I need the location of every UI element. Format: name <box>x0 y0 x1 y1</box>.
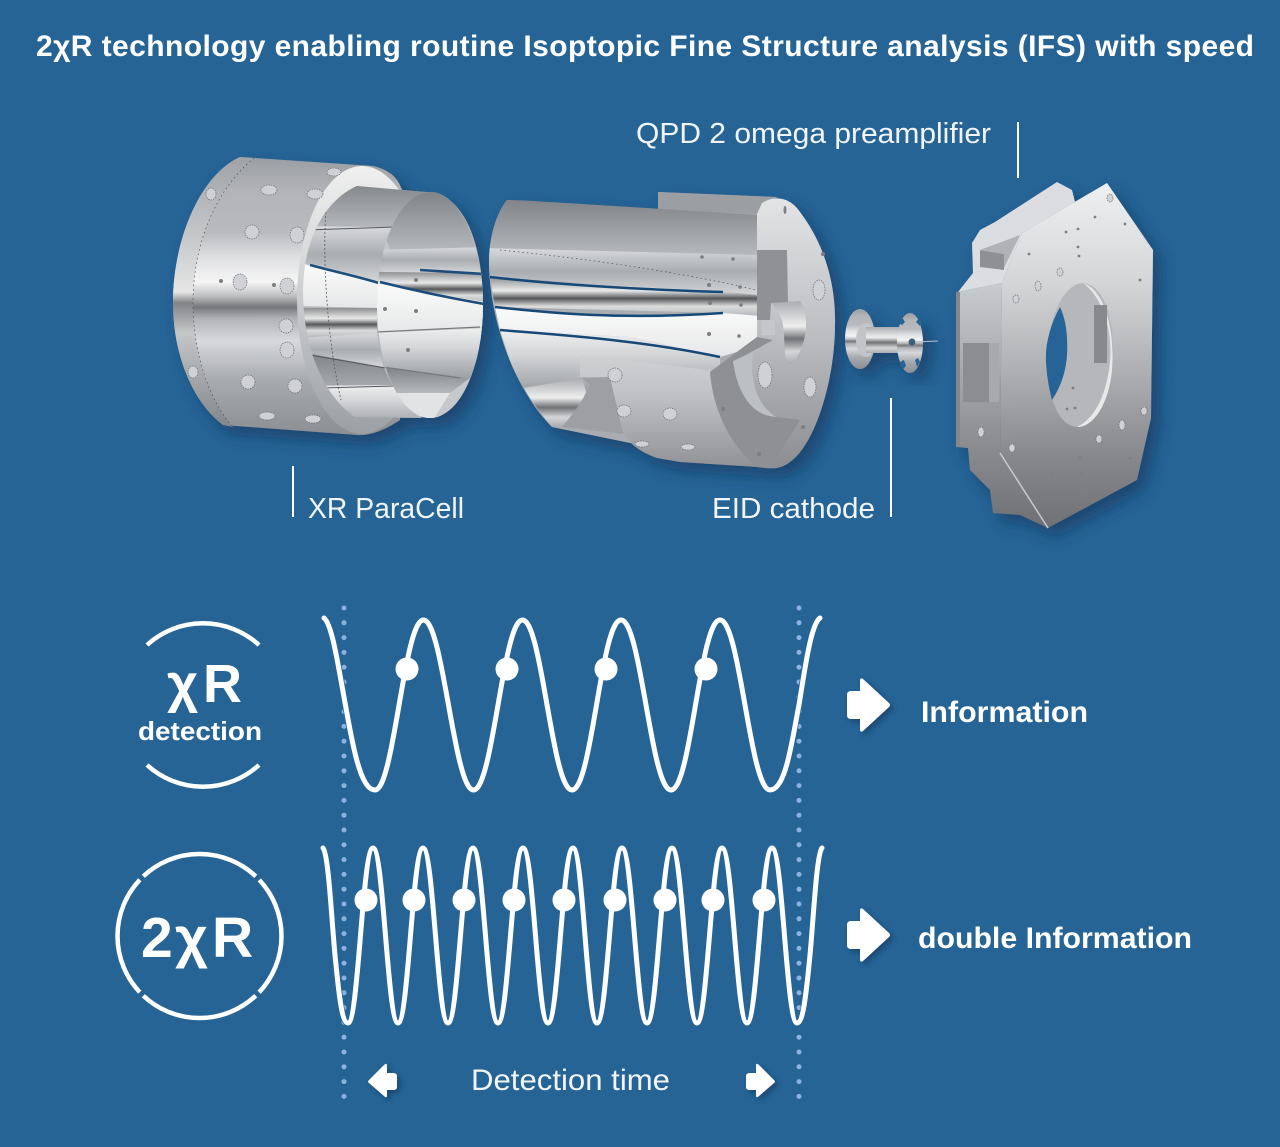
end disc <box>710 198 835 468</box>
central cell section <box>485 192 835 468</box>
right flange <box>897 313 923 373</box>
outer shell <box>580 355 757 467</box>
inner rectangle <box>1094 305 1107 363</box>
cut face <box>710 337 800 468</box>
tube <box>866 327 900 353</box>
label: double Information: double Information <box>918 922 1192 955</box>
arrow: information <box>847 678 890 732</box>
left flange <box>845 309 875 369</box>
back plate lower <box>956 283 1048 528</box>
dotted time boundary lines <box>344 608 799 1100</box>
label: Information: Information <box>921 696 1088 729</box>
hole rim highlight <box>1077 283 1113 427</box>
label text: QPD 2 omega preamplifier <box>636 118 991 150</box>
arrow: detection time left <box>368 1064 397 1097</box>
top arc <box>147 623 259 645</box>
label: detection time: Detection time <box>471 1064 670 1097</box>
central hole <box>1043 281 1117 429</box>
interior of cell <box>489 192 773 445</box>
QPD preamplifier board <box>956 182 1153 528</box>
grey component <box>963 343 989 402</box>
connector block <box>980 250 1004 270</box>
badge subtitle: detection <box>138 716 262 746</box>
XR ParaCell component <box>173 157 490 435</box>
badge title: R <box>203 654 242 714</box>
needle <box>915 341 938 342</box>
badge title: χ <box>175 906 208 970</box>
badge title: R <box>212 906 253 970</box>
xR detection badge <box>138 623 262 787</box>
top block <box>658 192 778 214</box>
EID cathode component <box>845 309 938 373</box>
2xR waveform <box>323 848 822 1023</box>
central bore wall <box>757 250 788 320</box>
board holes <box>978 194 1147 493</box>
label text: XR ParaCell <box>308 493 464 525</box>
central bore <box>771 301 806 364</box>
inner cylinder <box>300 180 490 425</box>
sample points <box>354 888 776 912</box>
front plate <box>1000 183 1153 528</box>
bottom arc <box>147 765 259 787</box>
title: 2χR technology enabling routine Isoptopic Fine Structure analysis (IFS) with speed <box>36 30 1254 63</box>
xR waveform <box>324 618 820 790</box>
arrow: double information <box>847 908 890 962</box>
leader line <box>1017 122 1019 178</box>
leader line <box>890 398 892 517</box>
label text: EID cathode <box>712 493 875 525</box>
see-through opening <box>1046 307 1067 400</box>
outer cylinder <box>173 157 402 435</box>
flange notches <box>899 317 922 369</box>
2xR badge <box>84 820 315 1052</box>
left rim band <box>173 157 254 427</box>
segmented circle <box>84 820 315 1052</box>
front ring <box>297 166 427 434</box>
badge title: χ <box>167 654 198 714</box>
lower inner surfaces <box>524 378 586 427</box>
leader line <box>292 466 294 517</box>
sample points <box>396 658 718 680</box>
arrow: detection time right <box>746 1064 775 1097</box>
crescent recess <box>733 352 776 417</box>
badge title: 2 <box>141 906 173 970</box>
plate edge highlight <box>1000 453 1048 528</box>
mounting holes <box>188 168 341 423</box>
back plate upper <box>958 182 1107 292</box>
